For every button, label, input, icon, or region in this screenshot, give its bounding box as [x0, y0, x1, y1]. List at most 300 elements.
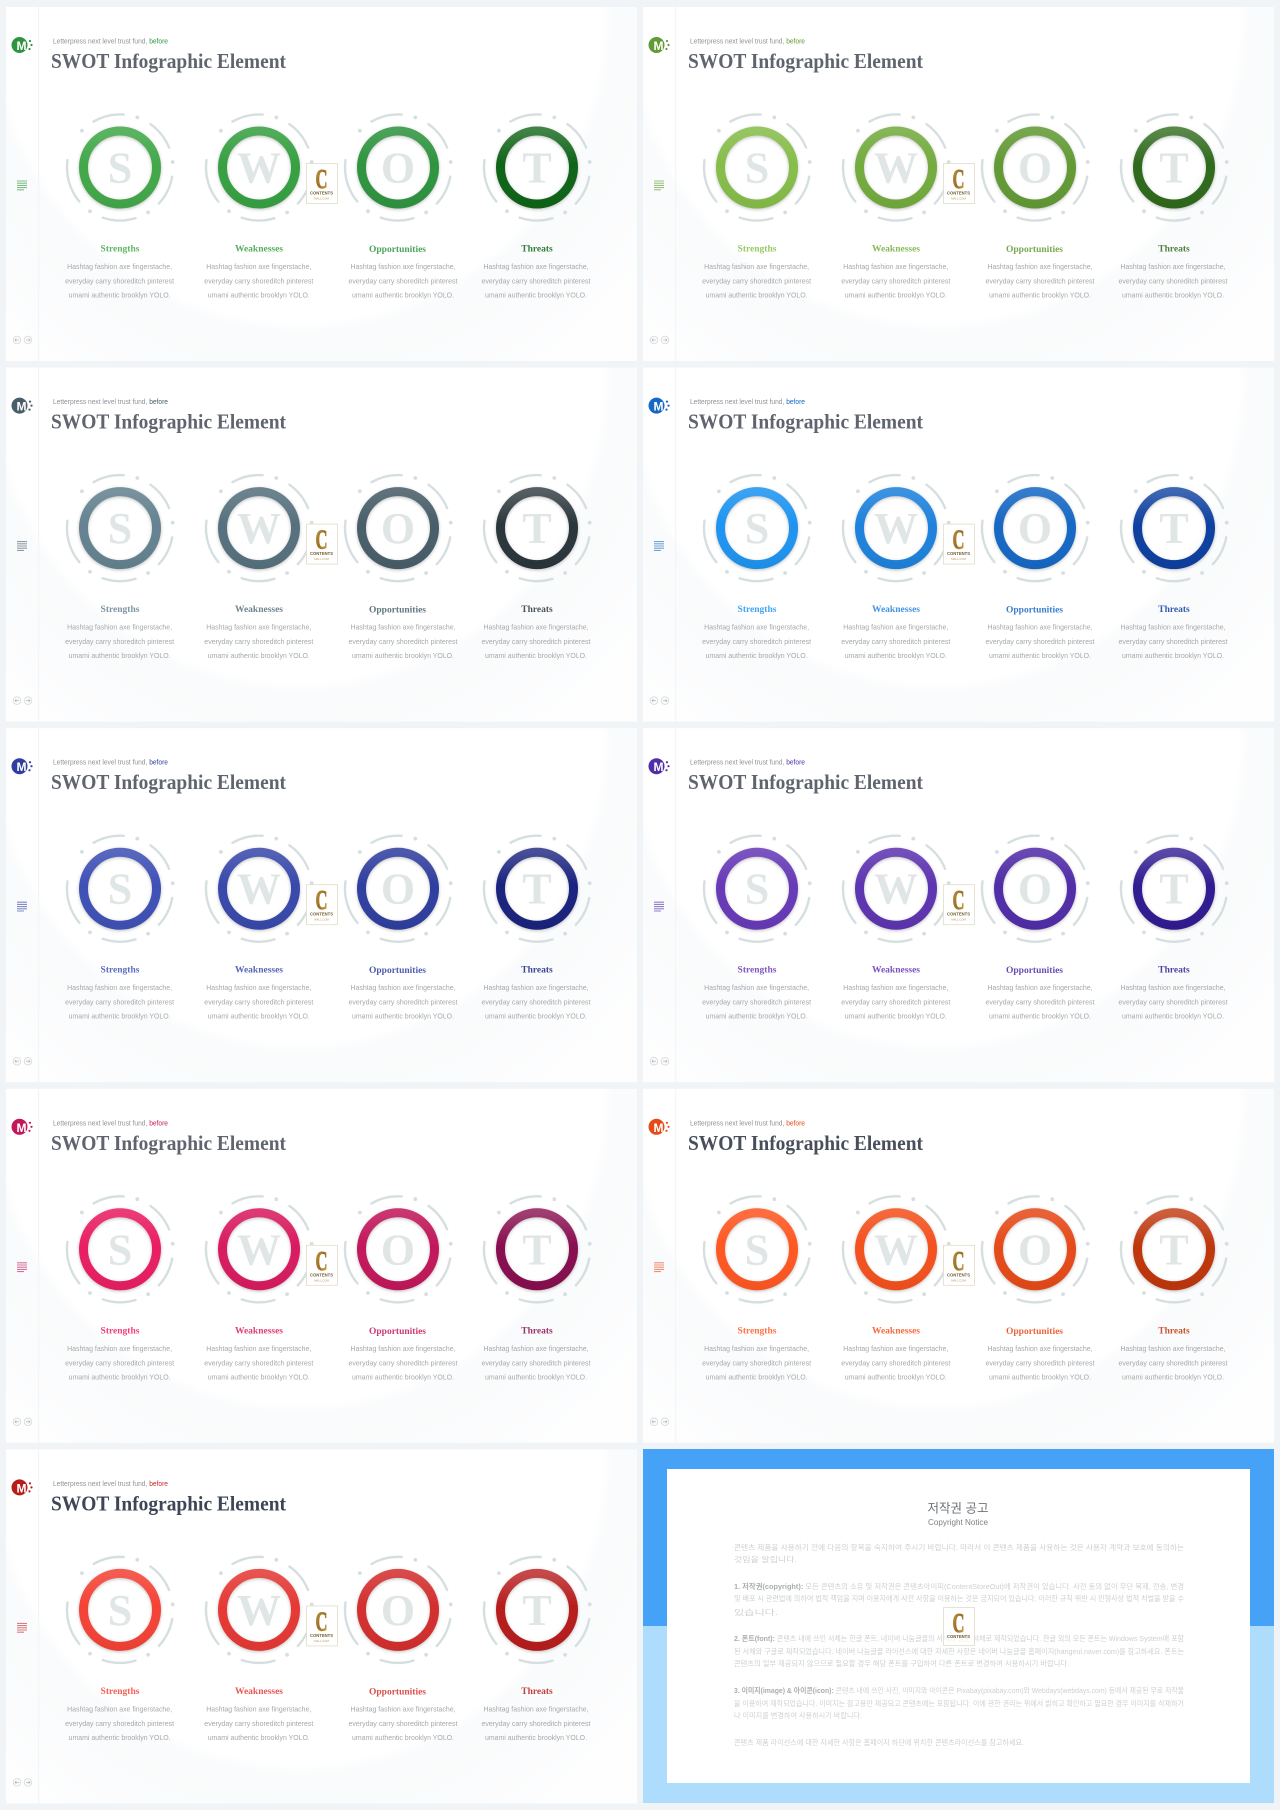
watermark: [944, 524, 974, 564]
text: Threats: umami authentic brooklyn YOLO.: [1122, 290, 1224, 300]
text: Opportunities: Opportunities: [369, 606, 426, 616]
watermark: CONTENTS: [947, 1634, 970, 1639]
watermark: CONTENTS: [310, 190, 333, 196]
text: Weaknesses: umami authentic brooklyn YOLO.: [845, 290, 947, 300]
ring: T: [484, 1557, 592, 1663]
subtitle: Letterpress next level trust fund, before: [690, 758, 805, 767]
copyright body text: 콘텐츠의 일부 제공되지 않으므로 필요할 경우 해당 폰트를 구입하여 다른 폰트로 변경하여 사용하시기 바랍니다.: [734, 1659, 1069, 1668]
text: Strengths: everyday carry shoreditch pinterest: [65, 1719, 174, 1728]
ring: W: [206, 114, 314, 221]
watermark: CONTENTS: [947, 190, 970, 196]
ring: W: W: [874, 144, 918, 192]
text: Threats: Threats: [521, 1326, 553, 1336]
watermark: [944, 1245, 974, 1285]
text: Opportunities: Opportunities: [1006, 1327, 1063, 1337]
text: Weaknesses: everyday carry shoreditch pinterest: [841, 1358, 950, 1367]
logo: blue: [648, 398, 670, 414]
watermark: [944, 1608, 974, 1646]
ring: T: T: [1159, 1225, 1189, 1274]
watermark: [306, 1606, 338, 1646]
text: Strengths: umami authentic brooklyn YOLO.: [706, 651, 808, 660]
logo: lime: M: [654, 39, 664, 53]
text: Weaknesses: Weaknesses: [235, 244, 283, 254]
text: Opportunities: Opportunities: [369, 1687, 426, 1697]
panel: lime SWOT: [643, 7, 1274, 361]
ring: S: S: [108, 1586, 132, 1635]
logo: grey: [12, 398, 33, 414]
ring: W: [206, 836, 314, 942]
ring: S: S: [108, 504, 132, 553]
text: Threats: Hashtag fashion axe fingerstache,: [1120, 623, 1226, 632]
text: Opportunities: umami authentic brooklyn YOLO.: [989, 1012, 1091, 1021]
text: Threats: Threats: [521, 966, 553, 976]
text: Opportunities: everyday carry shoreditch pinterest: [986, 1358, 1094, 1367]
icon: nav arrows: [13, 1057, 32, 1065]
text: Threats: umami authentic brooklyn YOLO.: [1122, 1012, 1224, 1021]
text: Strengths: [702, 1326, 811, 1381]
copyright body text: 콘텐츠 제품 라이선스에 대한 자세한 사항은 홈페이지 하단에 위치한 콘텐츠라이선스를 참고하세요.: [734, 1738, 1024, 1747]
text: Weaknesses: everyday carry shoreditch pinterest: [841, 276, 950, 286]
ring: O: O: [381, 504, 415, 553]
text: Opportunities: Opportunities: [1006, 966, 1063, 976]
text: Opportunities: Hashtag fashion axe fingerstache,: [350, 1704, 456, 1713]
text: Opportunities: [986, 606, 1094, 660]
text: Threats: Hashtag fashion axe fingerstache,: [484, 262, 588, 271]
ring: T: T: [522, 1586, 552, 1635]
text: Weaknesses: [204, 966, 313, 1021]
logo: orange: M: [654, 1121, 664, 1135]
icon: nav arrows: [13, 1779, 32, 1786]
text: Threats: [1118, 966, 1228, 1021]
text: Strengths: Hashtag fashion axe fingerstache,: [67, 1344, 172, 1353]
text: Opportunities: Hashtag fashion axe fingerstache,: [350, 262, 456, 271]
watermark: MALL.COM: [314, 1278, 329, 1282]
text: Weaknesses: umami authentic brooklyn YOLO.: [208, 1733, 310, 1742]
text: Strengths: [65, 244, 174, 300]
icon: list: [17, 902, 27, 911]
text: Strengths: [65, 966, 174, 1021]
text: Opportunities: [348, 1687, 458, 1742]
text: Opportunities: everyday carry shoreditch pinterest: [986, 998, 1094, 1007]
text: Strengths: Strengths: [101, 244, 140, 254]
ring: W: [843, 475, 951, 581]
text: Weaknesses: [204, 1687, 313, 1742]
text: Opportunities: Opportunities: [369, 966, 426, 976]
text: Weaknesses: [841, 244, 950, 300]
ring: O: O: [381, 1225, 415, 1274]
text: Opportunities: everyday carry shoreditch pinterest: [986, 276, 1094, 286]
text: Weaknesses: everyday carry shoreditch pinterest: [204, 1358, 313, 1367]
text: Weaknesses: everyday carry shoreditch pinterest: [204, 1719, 313, 1728]
text: Weaknesses: [841, 1326, 950, 1381]
text: Opportunities: Hashtag fashion axe fingerstache,: [988, 262, 1092, 271]
watermark: C: [316, 885, 328, 915]
ring: S: [67, 475, 175, 581]
panel: grey SWOT: [6, 368, 637, 722]
text: Weaknesses: [204, 605, 313, 660]
text: Threats: everyday carry shoreditch pinterest: [482, 276, 590, 286]
watermark: MALL.COM: [314, 1639, 329, 1643]
ring: T: T: [522, 144, 552, 192]
ring: S: [67, 1196, 175, 1302]
ring: S: S: [745, 865, 769, 914]
text: Strengths: umami authentic brooklyn YOLO.: [69, 651, 171, 660]
ring: O: [345, 475, 453, 581]
watermark: MALL.COM: [314, 196, 329, 200]
text: Opportunities: Hashtag fashion axe fingerstache,: [350, 983, 456, 992]
title: SWOT Infographic Element: [51, 770, 286, 794]
text: Strengths: Strengths: [101, 1326, 140, 1336]
text: Threats: umami authentic brooklyn YOLO.: [485, 1012, 587, 1021]
text: Opportunities: everyday carry shoreditch pinterest: [348, 1719, 458, 1728]
ring: W: W: [237, 504, 281, 553]
text: Strengths: [702, 244, 811, 300]
watermark: CONTENTS: [947, 1272, 970, 1277]
text: Threats: [482, 1326, 590, 1381]
text: Opportunities: [986, 245, 1094, 300]
panel: blue SWOT: [643, 368, 1274, 722]
text: Weaknesses: Hashtag fashion axe fingerstache,: [206, 1704, 311, 1713]
ring: T: [484, 475, 592, 581]
ring: W: W: [237, 1225, 281, 1274]
text: Opportunities: [986, 966, 1094, 1021]
text: Opportunities: Hashtag fashion axe fingerstache,: [988, 623, 1092, 632]
watermark: C: [952, 164, 964, 194]
panel: green SWOT: [6, 7, 637, 361]
text: Threats: Threats: [521, 1687, 553, 1697]
icon: nav arrows: [13, 336, 32, 344]
text: Weaknesses: Weaknesses: [235, 1326, 283, 1336]
text: Weaknesses: Weaknesses: [235, 1687, 283, 1697]
text: Strengths: [702, 966, 811, 1021]
text: Threats: Hashtag fashion axe fingerstache,: [484, 983, 588, 992]
text: Strengths: everyday carry shoreditch pinterest: [65, 998, 174, 1007]
watermark: C: [316, 164, 328, 194]
ring: S: [704, 114, 812, 221]
title: SWOT Infographic Element: [688, 49, 923, 73]
text: Threats: everyday carry shoreditch pinterest: [1118, 998, 1228, 1007]
text: Threats: everyday carry shoreditch pinterest: [482, 1719, 590, 1728]
text: Opportunities: Hashtag fashion axe fingerstache,: [350, 623, 456, 632]
text: Strengths: Strengths: [738, 605, 777, 615]
watermark: C: [316, 1606, 328, 1636]
text: Opportunities: everyday carry shoreditch pinterest: [986, 637, 1094, 646]
copyright body text: 있습니다.: [734, 1608, 778, 1617]
text: Threats: [1118, 1326, 1228, 1381]
ring: T: T: [1159, 504, 1189, 553]
text: Weaknesses: [841, 966, 950, 1021]
text: Threats: Hashtag fashion axe fingerstache,: [1120, 983, 1226, 992]
text: Threats: everyday carry shoreditch pinterest: [1118, 1358, 1228, 1367]
text: Threats: umami authentic brooklyn YOLO.: [485, 290, 587, 300]
text: Opportunities: Hashtag fashion axe fingerstache,: [350, 1344, 456, 1353]
watermark: C: [316, 1246, 328, 1276]
text: Threats: [482, 244, 590, 300]
text: Opportunities: umami authentic brooklyn YOLO.: [989, 651, 1091, 660]
text: Strengths: Strengths: [101, 966, 140, 976]
text: Weaknesses: Hashtag fashion axe fingerstache,: [843, 1344, 948, 1353]
ring: T: T: [522, 865, 552, 914]
text: Strengths: everyday carry shoreditch pinterest: [702, 276, 811, 286]
ring: T: T: [522, 1225, 552, 1274]
text: Strengths: Hashtag fashion axe fingerstache,: [704, 262, 809, 271]
watermark: CONTENTS: [310, 1633, 333, 1638]
text: Strengths: Strengths: [738, 966, 777, 976]
logo: red: M: [16, 1481, 26, 1495]
panel: purple SWOT: [643, 728, 1274, 1082]
text: Opportunities: [348, 245, 458, 300]
text: Strengths: Hashtag fashion axe fingerstache,: [704, 1344, 809, 1353]
icon: list: [17, 1623, 27, 1632]
icon: list: [654, 1263, 664, 1272]
text: Weaknesses: Hashtag fashion axe fingerstache,: [206, 262, 311, 271]
icon: list: [17, 542, 27, 550]
text: Strengths: umami authentic brooklyn YOLO.: [69, 1733, 171, 1742]
text: Opportunities: Hashtag fashion axe fingerstache,: [988, 983, 1092, 992]
text: Strengths: Strengths: [738, 1326, 777, 1336]
text: Strengths: Strengths: [738, 244, 777, 254]
ring: O: O: [1018, 504, 1052, 553]
logo: red: [12, 1479, 33, 1495]
text: Opportunities: umami authentic brooklyn YOLO.: [352, 651, 454, 660]
panel: red SWOT: [6, 1449, 637, 1803]
text: Strengths: Strengths: [101, 1687, 140, 1697]
subtitle: Letterpress next level trust fund, before: [53, 1479, 168, 1488]
copyright body text: 1. 저작권(copyright): 모든 콘텐츠의 소유 및 저작권은 콘텐츠아이피(ContentStoreOut)에 저작권이 있습니다. 사전 동의 없이 무단 복제, 전송, 변경: [734, 1582, 1184, 1591]
text: Weaknesses: Weaknesses: [872, 605, 920, 615]
text: Threats: [1118, 244, 1228, 300]
text: Opportunities: Hashtag fashion axe fingerstache,: [988, 1344, 1092, 1353]
logo: purple: M: [654, 760, 664, 774]
ring: S: S: [745, 144, 769, 192]
watermark: MALL.COM: [314, 557, 329, 561]
panel: indigo SWOT: [6, 728, 637, 1082]
text: Strengths: umami authentic brooklyn YOLO.: [69, 1012, 171, 1021]
title: SWOT Infographic Element: [51, 1131, 286, 1155]
panel: orange SWOT: [643, 1089, 1274, 1443]
text: Strengths: [65, 1326, 174, 1381]
icon: nav arrows: [650, 1057, 669, 1065]
text: Threats: Threats: [521, 244, 553, 254]
subtitle: Letterpress next level trust fund, before: [690, 397, 805, 406]
watermark: MALL.COM: [314, 918, 329, 922]
watermark: CONTENTS: [310, 1272, 333, 1277]
text: Opportunities: everyday carry shoreditch pinterest: [348, 637, 458, 646]
text: Threats: Threats: [521, 605, 553, 615]
text: Strengths: umami authentic brooklyn YOLO.: [69, 1372, 171, 1381]
ring: W: W: [874, 1225, 918, 1274]
ring: T: [1121, 1196, 1229, 1302]
ring: W: W: [237, 144, 281, 192]
text: Weaknesses: [204, 244, 313, 300]
ring: O: O: [381, 1586, 415, 1635]
copyright heading: 저작권 공고: [928, 1502, 988, 1516]
text: Weaknesses: umami authentic brooklyn YOLO.: [845, 1372, 947, 1381]
watermark: [306, 885, 338, 925]
ring: O: [982, 1196, 1090, 1302]
ring: S: [67, 836, 175, 942]
copyright body text: 2. 폰트(font): 콘텐츠 내에 쓰인 서체는 한글 폰트, 네이버 나눔글꼴의 서체와 영문 서체로 제작되었습니다. 한글 외의 모든 폰트는 Windows System에 포함: [734, 1634, 1184, 1643]
subtitle: Letterpress next level trust fund, before: [53, 36, 168, 46]
text: Opportunities: [348, 966, 458, 1021]
text: Weaknesses: Weaknesses: [872, 1326, 920, 1336]
ring: W: W: [874, 504, 918, 553]
text: Threats: [482, 966, 590, 1021]
ring: O: O: [1018, 865, 1052, 914]
copyright body text: 것임을 알립니다.: [734, 1555, 797, 1564]
text: Threats: umami authentic brooklyn YOLO.: [1122, 651, 1224, 660]
ring: W: [206, 475, 314, 581]
subtitle: Letterpress next level trust fund, before: [690, 1118, 805, 1127]
text: Weaknesses: umami authentic brooklyn YOLO.: [208, 1372, 310, 1381]
text: Threats: Hashtag fashion axe fingerstache,: [484, 1704, 588, 1713]
ring: W: W: [874, 865, 918, 914]
text: Opportunities: umami authentic brooklyn YOLO.: [352, 290, 454, 300]
ring: S: [704, 836, 812, 942]
ring: O: [982, 836, 1090, 942]
copyright body text: 나 이미지를 변경하여 사용하시기 바랍니다.: [734, 1711, 862, 1720]
ring: T: [1121, 475, 1229, 581]
text: Opportunities: Opportunities: [369, 245, 426, 255]
ring: T: [484, 836, 592, 942]
text: Opportunities: umami authentic brooklyn YOLO.: [352, 1733, 454, 1742]
subtitle: Letterpress next level trust fund, before: [53, 397, 168, 406]
text: Weaknesses: Hashtag fashion axe fingerstache,: [843, 983, 948, 992]
ring: W: [206, 1196, 314, 1302]
icon: list: [654, 902, 664, 911]
watermark: [306, 164, 338, 204]
watermark: C: [952, 885, 964, 915]
logo: indigo: [12, 758, 33, 774]
watermark: [944, 164, 974, 204]
logo: indigo: M: [16, 760, 26, 774]
ring: S: S: [745, 1225, 769, 1274]
text: Weaknesses: everyday carry shoreditch pinterest: [204, 637, 313, 646]
text: Weaknesses: Weaknesses: [235, 605, 283, 615]
ring: O: [345, 114, 453, 221]
copyright body text: 3. 이미지(image) & 아이콘(icon): 콘텐츠 내에 쓰인 사진, 이미지와 아이콘은 Pixabay(pixabay.com)와 Webdays(webdays.com) 등에서 제공된 무료 저작물: [734, 1686, 1184, 1695]
text: Threats: umami authentic brooklyn YOLO.: [1122, 1372, 1224, 1381]
title: SWOT Infographic Element: [688, 770, 923, 794]
text: Weaknesses: umami authentic brooklyn YOLO.: [845, 1012, 947, 1021]
text: Opportunities: umami authentic brooklyn YOLO.: [989, 290, 1091, 300]
text: Weaknesses: everyday carry shoreditch pinterest: [841, 637, 950, 646]
text: Opportunities: everyday carry shoreditch pinterest: [348, 276, 458, 286]
icon: list: [654, 181, 664, 190]
ring: O: O: [381, 865, 415, 914]
icon: nav arrows: [13, 1418, 32, 1426]
ring: S: [67, 1557, 175, 1663]
text: Strengths: everyday carry shoreditch pinterest: [65, 637, 174, 646]
title: SWOT Infographic Element: [688, 1131, 923, 1155]
text: Strengths: everyday carry shoreditch pinterest: [702, 1358, 811, 1367]
ring: W: W: [237, 865, 281, 914]
watermark: [306, 524, 338, 564]
ring: O: O: [1018, 1225, 1052, 1274]
ring: O: [982, 114, 1090, 221]
logo: green: [12, 37, 33, 53]
logo: pink: M: [16, 1121, 26, 1135]
icon: list: [654, 542, 664, 550]
title: SWOT Infographic Element: [688, 410, 923, 434]
ring: T: [1121, 836, 1229, 942]
text: Opportunities: umami authentic brooklyn YOLO.: [352, 1372, 454, 1381]
text: Weaknesses: Hashtag fashion axe fingerstache,: [206, 1344, 311, 1353]
logo: blue: M: [654, 400, 664, 414]
ring: T: [1121, 114, 1229, 221]
text: Threats: [1118, 605, 1228, 660]
text: Strengths: everyday carry shoreditch pinterest: [65, 1358, 174, 1367]
ring: O: [982, 475, 1090, 581]
text: Strengths: umami authentic brooklyn YOLO.: [69, 290, 171, 300]
text: Strengths: umami authentic brooklyn YOLO.: [706, 1012, 808, 1021]
text: Threats: Threats: [1158, 244, 1190, 254]
text: Weaknesses: umami authentic brooklyn YOLO.: [208, 290, 310, 300]
text: Strengths: umami authentic brooklyn YOLO.: [706, 290, 808, 300]
text: Opportunities: Opportunities: [369, 1327, 426, 1337]
text: Threats: everyday carry shoreditch pinterest: [1118, 637, 1228, 646]
icon: nav arrows: [650, 697, 669, 704]
title: SWOT Infographic Element: [51, 1491, 286, 1515]
text: Weaknesses: Hashtag fashion axe fingerstache,: [843, 623, 948, 632]
logo: purple: [648, 758, 670, 774]
watermark: [306, 1245, 338, 1285]
text: Strengths: Hashtag fashion axe fingerstache,: [67, 623, 172, 632]
watermark: MALL.COM: [951, 196, 966, 200]
copyright body text: 콘텐츠 제품을 사용하기 전에 다음의 항목을 숙지하여 주시기 바랍니다. 따라서 이 콘텐츠 제품을 사용하는 것은 사용자 계약과 보호에 동의하는: [734, 1543, 1184, 1552]
text: Weaknesses: umami authentic brooklyn YOLO.: [845, 651, 947, 660]
watermark: CONTENTS: [947, 551, 970, 556]
icon: list: [17, 1263, 27, 1272]
ring: S: S: [745, 504, 769, 553]
text: Weaknesses: everyday carry shoreditch pinterest: [204, 998, 313, 1007]
text: Threats: everyday carry shoreditch pinterest: [482, 1358, 590, 1367]
ring: S: S: [108, 865, 132, 914]
ring: S: S: [108, 144, 132, 192]
text: Strengths: everyday carry shoreditch pinterest: [702, 637, 811, 646]
ring: W: [843, 114, 951, 221]
logo: orange: [648, 1119, 670, 1135]
ring: T: T: [1159, 865, 1189, 914]
ring: S: [704, 1196, 812, 1302]
watermark: CONTENTS: [310, 912, 333, 917]
ring: S: S: [108, 1225, 132, 1274]
text: Opportunities: [986, 1327, 1094, 1381]
text: Weaknesses: Hashtag fashion axe fingerstache,: [206, 623, 311, 632]
ring: S: [67, 114, 175, 221]
text: Strengths: Hashtag fashion axe fingerstache,: [67, 983, 172, 992]
text: Weaknesses: Weaknesses: [235, 966, 283, 976]
text: Opportunities: umami authentic brooklyn YOLO.: [352, 1012, 454, 1021]
text: Threats: [482, 1687, 590, 1742]
text: Threats: umami authentic brooklyn YOLO.: [485, 1372, 587, 1381]
watermark: MALL.COM: [951, 1278, 966, 1282]
watermark: C: [952, 1608, 964, 1638]
subtitle: Letterpress next level trust fund, before: [53, 1118, 168, 1127]
text: Weaknesses: Hashtag fashion axe fingerstache,: [206, 983, 311, 992]
icon: nav arrows: [650, 336, 669, 344]
logo: lime: [648, 37, 670, 53]
subtitle: Letterpress next level trust fund, before: [53, 758, 168, 767]
logo: pink: [12, 1119, 33, 1135]
text: Threats: umami authentic brooklyn YOLO.: [485, 651, 587, 660]
logo: grey: M: [16, 400, 26, 414]
text: Weaknesses: everyday carry shoreditch pinterest: [841, 998, 950, 1007]
text: Threats: everyday carry shoreditch pinterest: [482, 998, 590, 1007]
ring: T: [484, 114, 592, 221]
text: Strengths: [65, 605, 174, 660]
text: Strengths: Strengths: [101, 605, 140, 615]
